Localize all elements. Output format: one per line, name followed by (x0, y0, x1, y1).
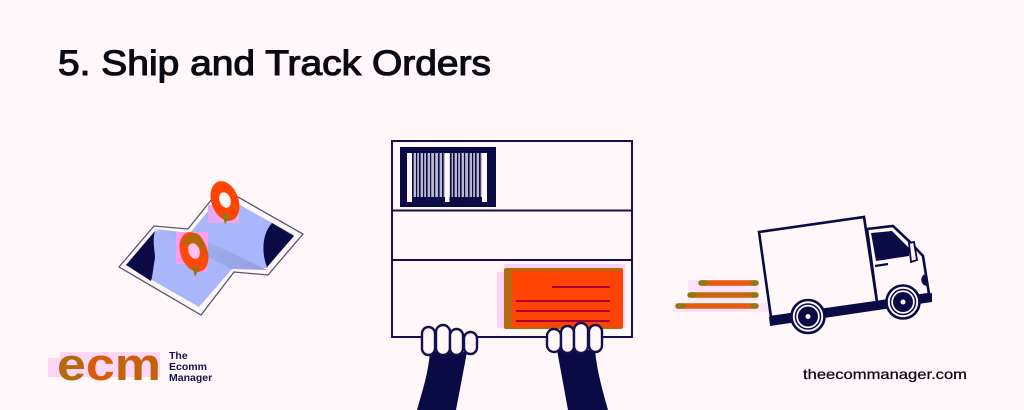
icon: delivery truck (759, 217, 932, 333)
logo (48, 339, 212, 390)
title: 5. Ship and Track Orders (58, 44, 491, 83)
shipping label (497, 264, 625, 329)
logo: ecm (57, 339, 161, 390)
right hand (547, 323, 608, 410)
logo: Ecomm (169, 361, 207, 373)
icon: upper pin (205, 177, 245, 225)
barcode (400, 147, 496, 207)
parcel box (392, 141, 632, 337)
icon: folded map with pins (119, 177, 303, 315)
logo: The (169, 350, 188, 362)
pin highlight (208, 205, 239, 223)
logo: Manager (169, 372, 212, 384)
left hand (417, 325, 477, 410)
website url: theecommanager.com (803, 366, 967, 382)
icon: lower pin (174, 228, 214, 277)
speed lines (673, 280, 769, 312)
pin highlight (176, 232, 208, 272)
